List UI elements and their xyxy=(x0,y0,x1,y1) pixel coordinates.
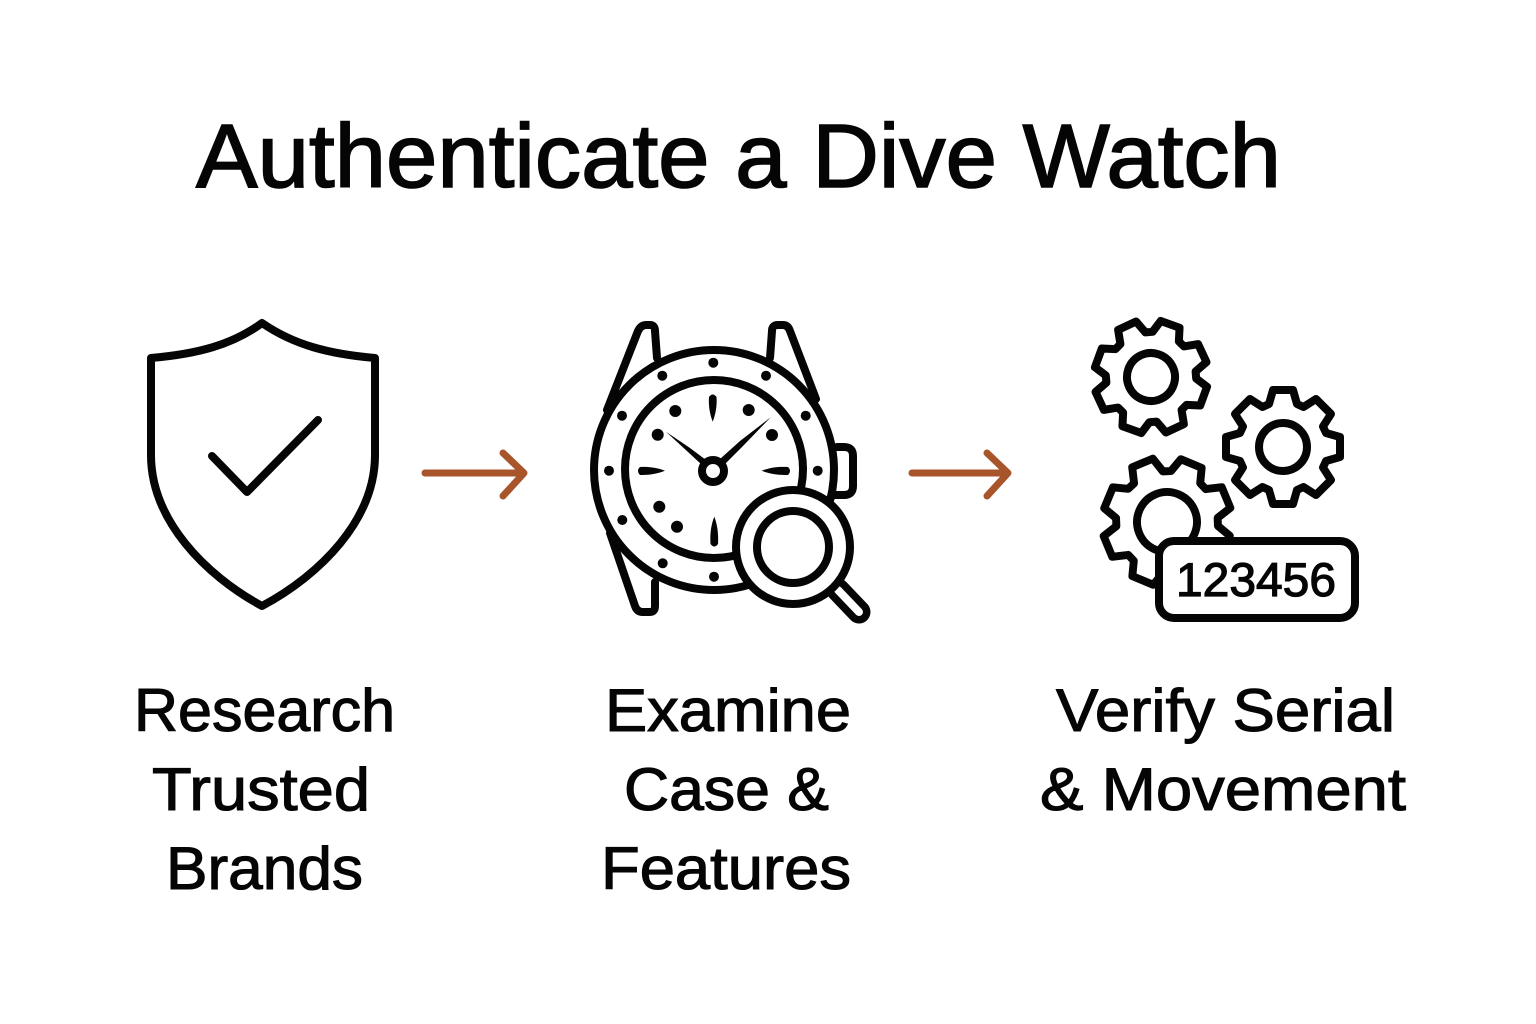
serial number plate xyxy=(1159,541,1355,618)
bezel dots xyxy=(604,358,823,582)
arrow: step 2 to step 3 xyxy=(912,453,1008,496)
magnifier handle xyxy=(838,590,859,612)
serial number: 123456 xyxy=(1176,553,1336,606)
watch hands xyxy=(666,417,771,465)
step 2 label: Features xyxy=(601,835,851,902)
step 3 label xyxy=(1040,677,1406,823)
arrow: step 1 to step 2 xyxy=(425,453,524,496)
gear bottom xyxy=(1084,439,1250,605)
magnifier handle inner xyxy=(838,590,859,612)
icon: gears with serial number xyxy=(1079,305,1355,618)
title: Authenticate a Dive Watch xyxy=(196,107,1281,207)
watch bezel xyxy=(594,350,834,590)
step 3 label: Verify Serial xyxy=(1056,677,1395,744)
dial hour dots xyxy=(652,404,778,533)
step 1 label xyxy=(134,677,395,902)
step 1 label: Research xyxy=(134,677,395,744)
gear right xyxy=(1226,390,1340,504)
watch hub xyxy=(702,460,724,482)
watch lugs xyxy=(607,325,816,612)
icon: shield with checkmark xyxy=(151,323,375,606)
dial hour markers xyxy=(638,394,790,546)
gear top left xyxy=(1079,305,1223,449)
watch dial xyxy=(625,380,803,558)
watch crown xyxy=(832,447,853,495)
step 3 label: & Movement xyxy=(1040,756,1406,823)
step 2 label xyxy=(601,677,851,902)
step 1 label: Trusted xyxy=(152,756,370,823)
step 1 label: Brands xyxy=(166,835,363,902)
magnifier lens xyxy=(757,511,829,583)
icon: dive watch with magnifying glass xyxy=(594,325,859,612)
step 2 label: Examine xyxy=(605,677,851,744)
step 2 label: Case & xyxy=(624,756,829,823)
magnifier outer rim xyxy=(736,490,850,604)
